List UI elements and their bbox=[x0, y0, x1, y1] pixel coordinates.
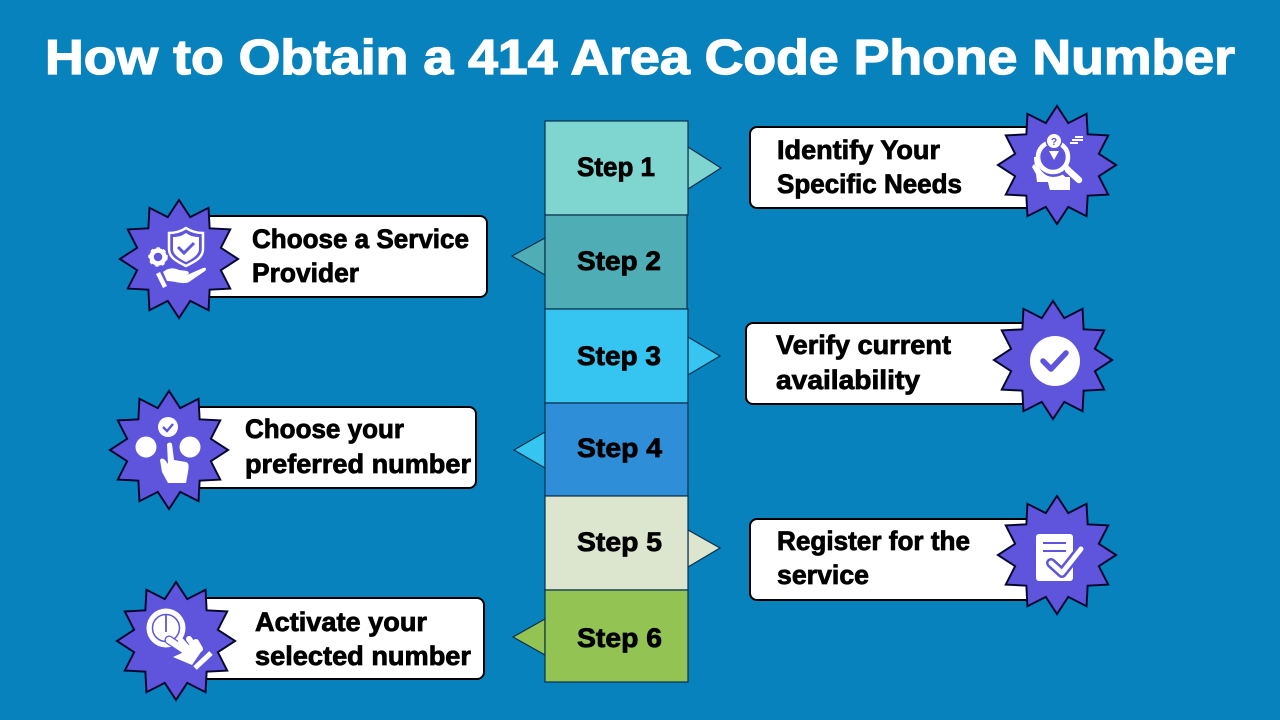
callout: choose a service provider: Choose a Service bbox=[252, 224, 469, 254]
step column bbox=[512, 121, 721, 682]
icon: head with magnifier bbox=[1032, 132, 1083, 190]
callout: activate your selected number bbox=[117, 582, 484, 700]
icon: check mark bbox=[1030, 336, 1080, 386]
callout: verify current availability: availability bbox=[776, 365, 920, 395]
callout: choose your preferred number: Choose your bbox=[245, 414, 404, 444]
step 2 block: Step 2 bbox=[577, 246, 661, 276]
icon: hand pressing power button bbox=[146, 608, 211, 668]
step 1 block: Step 1 bbox=[577, 152, 655, 182]
step 5 block: Step 5 bbox=[577, 527, 662, 557]
callout: choose your preferred number bbox=[110, 391, 476, 509]
title: How to Obtain a 414 Area Code Phone Number bbox=[45, 31, 1235, 85]
step 3 block: Step 3 bbox=[577, 341, 661, 371]
callout: verify current availability bbox=[746, 301, 1112, 419]
callout: identify your specific needs: Identify Your bbox=[777, 135, 940, 165]
callout: activate your selected number: selected number bbox=[255, 641, 471, 671]
callout: choose a service provider: Provider bbox=[252, 258, 359, 288]
callout: identify your specific needs bbox=[750, 106, 1116, 224]
step 1 block bbox=[545, 121, 721, 215]
callout: register for the service bbox=[750, 496, 1116, 614]
callout: verify current availability: Verify current bbox=[776, 330, 951, 360]
step 4 block bbox=[514, 403, 688, 496]
icon: finger choosing an option bbox=[136, 417, 200, 483]
callout: choose your preferred number: preferred number bbox=[245, 449, 471, 479]
icon: head with magnifier: ? bbox=[1051, 137, 1057, 148]
callout: identify your specific needs: Specific Needs bbox=[777, 169, 962, 199]
callout: activate your selected number: Activate your bbox=[255, 607, 427, 637]
step 5 block bbox=[545, 496, 720, 590]
callout: register for the service: Register for the bbox=[777, 526, 970, 556]
callout: choose a service provider bbox=[120, 200, 487, 318]
icon: document with check bbox=[1036, 534, 1081, 581]
step 6 block: Step 6 bbox=[577, 623, 662, 653]
callout: register for the service: service bbox=[777, 560, 869, 590]
step 6 block bbox=[513, 590, 688, 682]
step 2 block bbox=[512, 215, 687, 309]
icon: shield, gear and hand bbox=[150, 228, 206, 287]
step 4 block: Step 4 bbox=[577, 433, 662, 463]
step 3 block bbox=[545, 309, 720, 403]
